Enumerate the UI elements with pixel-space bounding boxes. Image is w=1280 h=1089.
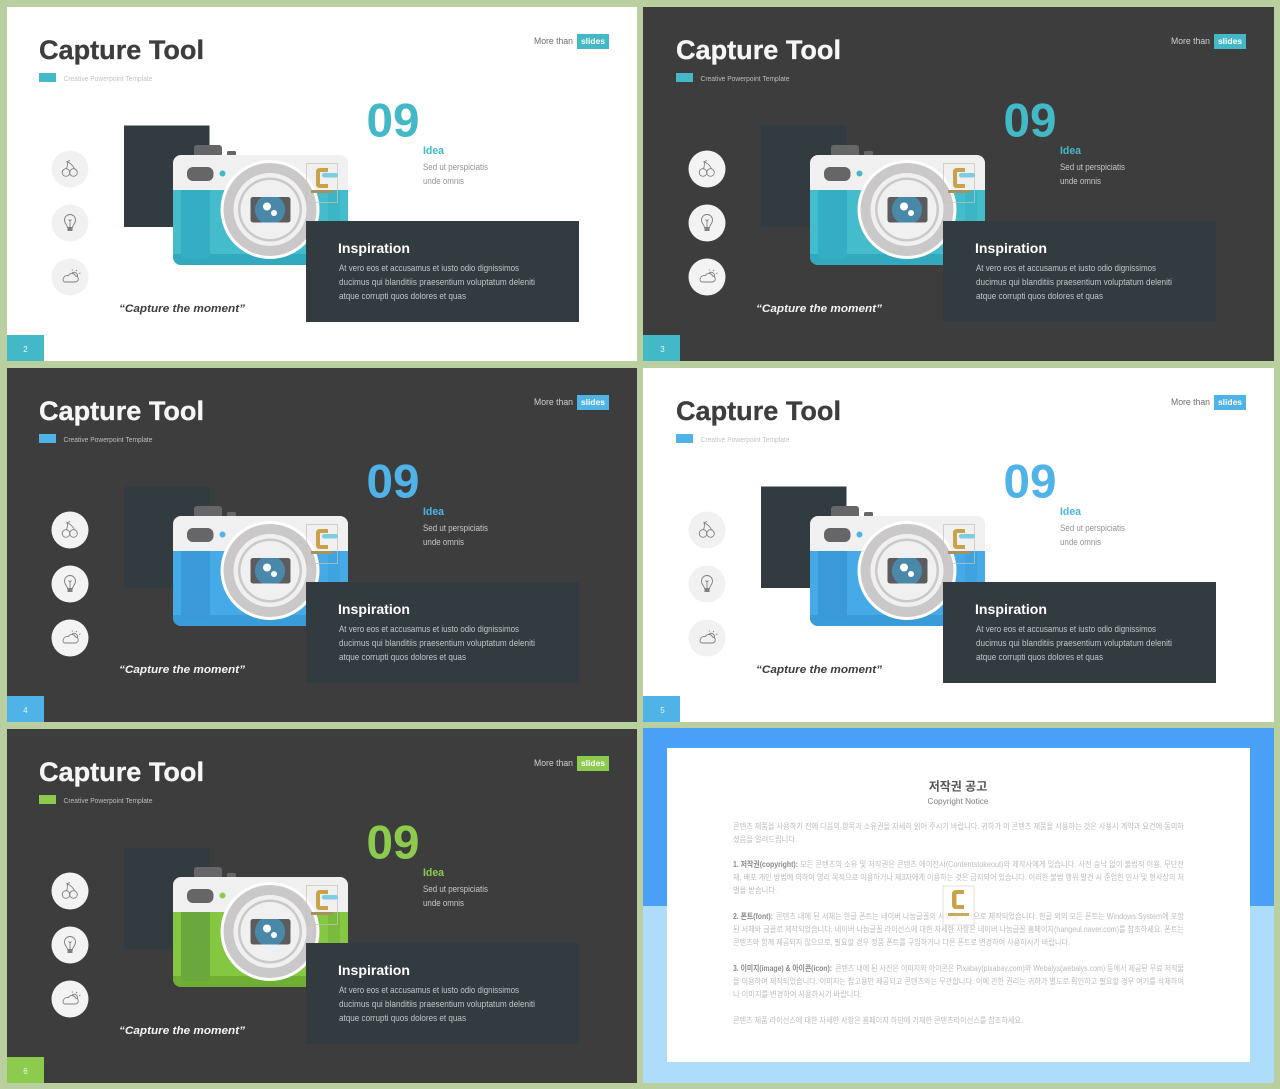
inspiration panel: At vero eos et accusamus et iusto odio dignissimos — [339, 624, 519, 635]
intro paragraph: 셨음을 알려드립니다. — [733, 834, 797, 844]
slides badge: slides — [1218, 397, 1242, 407]
idea text — [423, 162, 488, 186]
intro paragraph: 콘텐츠 제품을 사용하기 전에 다음의 항목과 소유권을 자세히 읽어 주시기 바랍니다. 귀하가 이 콘텐츠 제품을 사용하는 것은 사용시 계약과 요건에 동의하 — [733, 821, 1185, 831]
idea text — [1060, 162, 1125, 186]
more than label: More than — [534, 758, 573, 768]
accent swatch — [39, 795, 56, 804]
inspiration panel: Inspiration — [338, 962, 410, 978]
page tab: 5 — [660, 706, 665, 715]
icon: cherry — [52, 512, 88, 548]
idea heading: Idea — [423, 867, 445, 879]
notice title: 저작권 공고 — [929, 778, 987, 794]
page tab — [643, 696, 680, 722]
icon: light bulb — [688, 566, 726, 602]
slides badge: slides — [1218, 36, 1242, 46]
inspiration panel: atque corrupti quos dolores et quas — [339, 1013, 466, 1024]
title: Capture Tool — [39, 396, 204, 426]
icon: cherry — [52, 872, 88, 910]
camera illustration — [124, 486, 348, 626]
subtitle: Creative Powerpoint Template — [700, 76, 790, 83]
inspiration panel: Inspiration — [338, 601, 410, 617]
accent swatch — [39, 73, 56, 82]
panel: copyright notice slide — [643, 728, 1274, 1083]
slides badge — [577, 395, 609, 410]
quote: “Capture the moment” — [119, 1025, 246, 1037]
subtitle: Creative Powerpoint Template — [700, 437, 790, 444]
page tab — [7, 696, 44, 722]
title: Capture Tool — [39, 757, 204, 787]
camera illustration — [761, 126, 985, 265]
inspiration panel — [943, 582, 1216, 683]
big number: 09 — [366, 816, 420, 868]
section 2: font — [733, 911, 1185, 947]
quote: “Capture the moment” — [119, 303, 246, 315]
big number: 09 — [366, 454, 420, 508]
section 2: font: 콘텐츠 내에 된 서체는 한글 폰트는 네이버 나눔글꼴의 서체를 기반으로 제작되었습니다. 한글 외의 모든 폰트는 Windows System에 포함 — [776, 911, 1185, 921]
icon: cloud and sun — [688, 620, 726, 656]
more than label: More than — [534, 397, 573, 407]
section 3: image and icon: 콘텐츠 내에 된 사진은 이미지와 아이콘은 Pixabay(pixabay.com)와 Webalys(webalys.com) 등에서 제공된 무료 저작물 — [835, 963, 1184, 973]
panel: slide 3 dark teal — [643, 7, 1274, 361]
inspiration panel: ducimus qui blanditiis praesentium voluptatum deleniti — [976, 638, 1172, 649]
idea text: unde omnis — [423, 537, 464, 547]
section 2: font: 된 서체와 글꼴로 제작되었습니다. 네이버 나눔글꼴 라이선스에 대한 자세한 사항은 네이버 나눔글꼴 홈페이지(hangeul.naver.com)를 참조하세요. 폰트는 — [733, 924, 1184, 934]
quote: “Capture the moment” — [756, 664, 883, 676]
accent swatch — [39, 434, 56, 443]
icon: cloud and sun — [52, 620, 88, 656]
page tab — [7, 1057, 44, 1083]
section 1: copyright: 1. 저작권(copyright): — [733, 859, 798, 869]
more than label: More than — [534, 36, 573, 46]
section 1: copyright — [733, 859, 1184, 895]
inspiration panel — [306, 221, 579, 322]
idea heading: Idea — [1060, 506, 1082, 518]
inspiration panel: Inspiration — [975, 240, 1047, 256]
more than label: More than — [1171, 397, 1210, 407]
accent swatch — [676, 73, 693, 82]
section 3: image and icon: 나 이미지를 변경하여 사용하시기 바랍니다. — [733, 989, 862, 999]
page tab — [643, 335, 680, 361]
subtitle: Creative Powerpoint Template — [64, 76, 153, 83]
slides badge — [1214, 34, 1246, 49]
icon: light bulb — [52, 204, 88, 242]
inspiration panel: atque corrupti quos dolores et quas — [339, 291, 466, 302]
inspiration panel: Inspiration — [338, 240, 410, 256]
page tab: 2 — [23, 345, 28, 354]
idea text — [423, 523, 488, 547]
section 2: font: 2. 폰트(font): — [733, 912, 773, 921]
title: Capture Tool — [676, 396, 841, 426]
intro paragraph — [733, 821, 1185, 844]
subtitle: Creative Powerpoint Template — [64, 798, 153, 805]
inspiration panel: atque corrupti quos dolores et quas — [976, 291, 1103, 302]
watermark logo — [943, 886, 974, 925]
slides badge: slides — [581, 397, 605, 407]
page tab: 3 — [660, 345, 665, 354]
quote: “Capture the moment” — [119, 664, 246, 676]
idea heading: Idea — [423, 506, 445, 518]
icon: cloud and sun — [688, 258, 726, 296]
inspiration panel: ducimus qui blanditiis praesentium voluptatum deleniti — [339, 999, 535, 1010]
page tab: 6 — [23, 1067, 28, 1076]
camera illustration — [124, 848, 348, 987]
title: Capture Tool — [676, 35, 841, 65]
idea text: Sed ut perspiciatis — [1060, 523, 1125, 533]
inspiration panel: atque corrupti quos dolores et quas — [339, 652, 466, 663]
section 3: image and icon: 3. 이미지(image) & 아이콘(icon): — [733, 963, 832, 973]
icon: light bulb — [52, 926, 88, 964]
accent swatch — [676, 434, 693, 443]
camera illustration — [124, 126, 348, 265]
idea text: Sed ut perspiciatis — [1060, 162, 1125, 172]
inspiration panel: ducimus qui blanditiis praesentium voluptatum deleniti — [339, 638, 535, 649]
slides badge — [1214, 395, 1246, 410]
section 3: image and icon: 을 이용하여 제작되었습니다. 이미지는 참고용만 제공되고 콘텐츠와는 무관합니다. 이에 관한 권리는 귀하가 별도로 확인하고 필요할 경우 여기를 삭제하여 — [733, 976, 1184, 986]
page tab: 4 — [23, 706, 28, 715]
slides badge — [577, 756, 609, 771]
icon: cherry — [52, 150, 88, 188]
section 3: image and icon — [733, 963, 1184, 999]
idea text: unde omnis — [423, 898, 464, 908]
idea text: Sed ut perspiciatis — [423, 162, 488, 172]
idea text: Sed ut perspiciatis — [423, 523, 488, 533]
section 1: copyright: 벌을 받습니다. — [733, 885, 777, 895]
page tab — [7, 335, 44, 361]
idea text: Sed ut perspiciatis — [423, 884, 488, 894]
idea heading: Idea — [1060, 145, 1082, 157]
big number: 09 — [366, 94, 420, 146]
inspiration panel: At vero eos et accusamus et iusto odio dignissimos — [976, 263, 1156, 274]
panel: slide 2 light teal — [7, 7, 637, 361]
camera illustration — [761, 486, 985, 626]
inspiration panel: At vero eos et accusamus et iusto odio dignissimos — [339, 985, 519, 996]
section 1: copyright: 재, 배포 개인 방법에 의하여 영리 목적으로 이용하거나 제3자에게 이용하는 것은 금지되어 있습니다. 이러한 불법 행위 발견 시 준엄한 민사 및 형사상의 처 — [733, 872, 1184, 882]
quote: “Capture the moment” — [756, 303, 883, 315]
subtitle: Creative Powerpoint Template — [64, 437, 153, 444]
inspiration panel: ducimus qui blanditiis praesentium voluptatum deleniti — [976, 277, 1172, 288]
icon: light bulb — [688, 204, 726, 242]
more than label: More than — [1171, 36, 1210, 46]
idea text: unde omnis — [423, 176, 464, 186]
slides badge: slides — [581, 758, 605, 768]
section 1: copyright: 모든 콘텐츠의 소유 및 저작권은 콘텐츠 에이전시(Contentstokeout)와 제작사에게 있습니다. 사전 승낙 없이 불법적 이용, 무단전 — [800, 859, 1184, 869]
slides badge: slides — [581, 36, 605, 46]
slides badge — [577, 34, 609, 49]
inspiration panel: At vero eos et accusamus et iusto odio dignissimos — [976, 624, 1156, 635]
inspiration panel — [306, 582, 579, 683]
idea text — [1060, 523, 1125, 547]
panel: slide 5 light blue — [643, 368, 1274, 722]
closing line: 콘텐츠 제품 라이선스에 대한 자세한 사항은 홈페이지 하단에 기재한 콘텐츠라이선스를 참조하세요. — [733, 1015, 1023, 1025]
inspiration panel: Inspiration — [975, 601, 1047, 617]
icon: cloud and sun — [52, 980, 88, 1018]
icon: light bulb — [52, 566, 88, 602]
big number: 09 — [1004, 94, 1056, 146]
inspiration panel: At vero eos et accusamus et iusto odio dignissimos — [339, 263, 519, 274]
icon: cherry — [688, 150, 726, 188]
title: Capture Tool — [39, 35, 204, 65]
inspiration panel: ducimus qui blanditiis praesentium voluptatum deleniti — [339, 277, 535, 288]
panel: slide 6 dark green — [7, 729, 637, 1083]
panel: slide 4 dark blue — [7, 368, 637, 722]
inspiration panel — [306, 943, 579, 1044]
idea text: unde omnis — [1060, 176, 1101, 186]
inspiration panel: atque corrupti quos dolores et quas — [976, 652, 1103, 663]
section 2: font: 콘텐츠와 함께 제공되지 않으므로, 필요할 경우 정품 폰트를 구입하거나 다른 폰트로 변경하여 사용하시기 바랍니다. — [733, 937, 1070, 947]
icon: cherry — [688, 512, 726, 548]
idea text — [423, 884, 488, 908]
inspiration panel — [943, 221, 1216, 322]
notice subtitle: Copyright Notice — [928, 796, 989, 806]
idea heading: Idea — [423, 145, 445, 157]
big number: 09 — [1004, 454, 1056, 508]
idea text: unde omnis — [1060, 537, 1101, 547]
icon: cloud and sun — [52, 258, 88, 296]
